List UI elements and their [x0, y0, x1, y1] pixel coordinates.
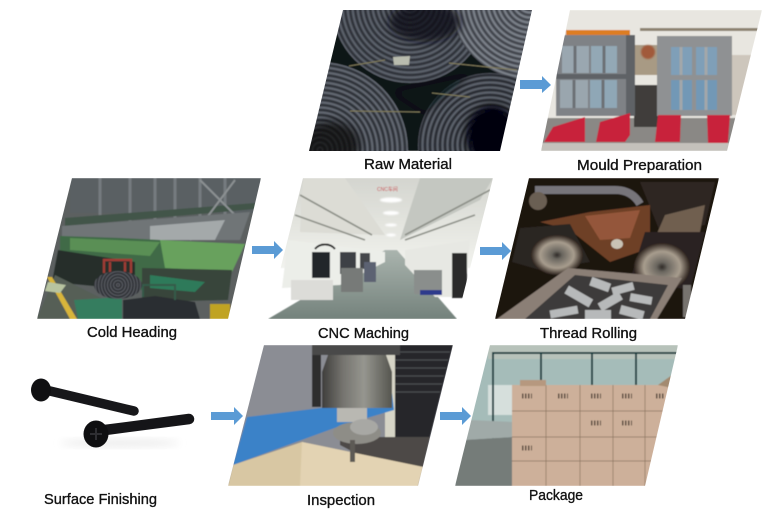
panel: inspection photo — [228, 345, 453, 486]
label: Package: Package — [529, 487, 583, 504]
coil shadows — [309, 10, 510, 151]
right machines — [404, 260, 468, 298]
left mould block — [556, 35, 635, 116]
roller left — [531, 235, 583, 275]
wire tie tag — [393, 56, 410, 65]
label: CNC Maching: CNC Maching — [318, 325, 409, 342]
top press bar — [312, 345, 400, 355]
label: Thread Rolling: Thread Rolling — [540, 325, 637, 342]
arrow: surface finishing to inspection — [211, 407, 243, 425]
floor — [542, 118, 736, 144]
factory floor — [38, 274, 98, 318]
orange top bar — [566, 30, 630, 35]
thread debris at edge — [683, 285, 691, 317]
panel: package photo — [455, 345, 678, 486]
stacked cartons — [512, 375, 672, 486]
screw bit — [350, 440, 355, 462]
wire coil: upper right — [452, 10, 532, 78]
left parts bins — [291, 280, 333, 300]
corrugated wall — [70, 178, 261, 213]
roller right — [634, 244, 690, 286]
cream wall — [385, 345, 400, 437]
glass frames — [492, 353, 678, 466]
copper housing — [540, 205, 650, 262]
wire coil: lower right — [417, 72, 516, 151]
panel: cold heading photo — [37, 178, 261, 319]
black slat blind — [395, 345, 453, 437]
ceiling lights — [380, 198, 402, 236]
arrow: CNC to thread rolling — [480, 242, 511, 260]
lower collet — [337, 408, 367, 422]
sign text: CNC车间 — [377, 186, 398, 193]
label: Mould Preparation: Mould Preparation — [577, 157, 702, 174]
bolt tray — [497, 268, 682, 319]
panel: thread rolling photo — [495, 178, 719, 319]
label: Inspection: Inspection — [307, 492, 375, 509]
wire coil: lower left — [309, 62, 409, 151]
label: Cold Heading: Cold Heading — [87, 324, 177, 341]
right parts racks — [414, 270, 442, 294]
arrow: raw material to mould — [520, 76, 551, 93]
floor — [455, 437, 512, 486]
label: Raw Material: Raw Material — [364, 156, 452, 173]
icon: black screws (surface finishing) — [31, 378, 189, 448]
soft shadow — [60, 439, 180, 447]
panel: raw material photo — [309, 10, 532, 151]
dark table — [340, 425, 430, 467]
threaded column — [312, 355, 321, 407]
red support blocks — [544, 113, 730, 143]
label: Surface Finishing: Surface Finishing — [44, 491, 157, 508]
wood block — [228, 442, 423, 486]
steel ties — [349, 60, 517, 112]
floor — [268, 250, 457, 319]
screw one — [31, 378, 134, 411]
metal spindle cylinder — [322, 355, 392, 408]
wire coil lower — [123, 296, 200, 319]
blue clamp bar — [233, 393, 394, 465]
coil handle — [104, 260, 131, 273]
panel: CNC machining photo — [268, 178, 493, 319]
wire coil: upper left — [337, 10, 472, 84]
green machines row — [60, 236, 168, 290]
panel: mould preparation photo — [541, 10, 762, 151]
wire coil upper — [94, 271, 142, 299]
right mould block — [657, 36, 732, 116]
arrow: cold heading to CNC — [252, 241, 283, 259]
arrow: inspection to package — [440, 407, 471, 425]
stud between rollers — [611, 239, 623, 249]
steel bolts — [550, 277, 653, 320]
yellow crate — [210, 304, 230, 319]
screw two — [84, 419, 189, 448]
left machines — [282, 251, 386, 288]
overhead pipe — [535, 190, 640, 204]
